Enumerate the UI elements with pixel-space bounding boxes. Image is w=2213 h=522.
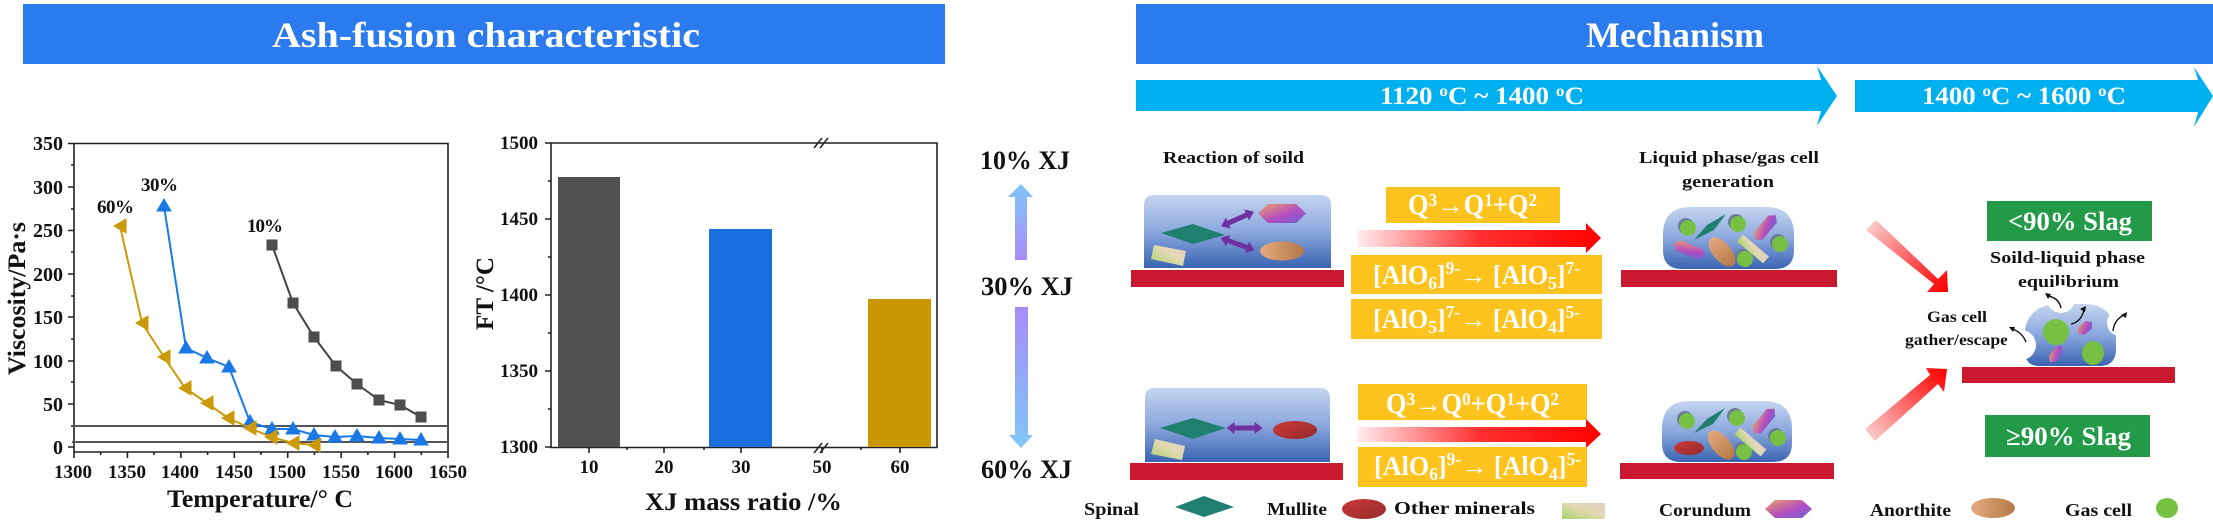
bar: 60 [868,299,931,447]
reaction box: Q3 top: 3 [1429,190,1437,210]
arrow: 1120 to 1400 C stage: C ~ 1400 [1448,83,1556,110]
heading: Mechanism [1136,4,2213,64]
x axis tick labels: 10 [580,457,598,478]
legend: other minerals [1394,498,1605,519]
reaction box: Q3 top: +Q [1493,190,1528,221]
x axis tick labels: 20 [654,457,674,478]
reaction box: AlO6 to AlO5: 7- [1565,258,1580,278]
x axis tick labels: 1550 [322,462,360,483]
y axis tick labels: 1450 [500,209,538,230]
heading: Mechanism: Mechanism [1586,15,1764,55]
y axis tick labels: 250 [33,220,63,242]
y axis tick labels: 1300 [500,437,538,458]
arrow: 1400 to 1600 C stage: 1400 [1922,83,1972,110]
y axis tick labels: 50 [43,394,63,416]
heading: Ash-fusion characteristic: Ash-fusion characteristic [272,15,700,55]
arrow: 1120 to 1400 C stage: 1120 [1380,83,1429,110]
reaction box: AlO6 to AlO4: ] [1558,451,1566,481]
reaction box: Q3 top: Q [1408,190,1430,221]
label: Liquid phase/gas cell generation [1639,148,1819,191]
y axis tick labels: 0 [53,437,63,459]
label: Soild-liquid phase equilibrium [1990,248,2146,291]
x axis tick labels [580,457,910,478]
arrow: down [1009,307,1033,448]
label: Gas cell gather/escape: Gas cell [1927,309,1988,326]
reaction box: Q3 bottom: 3 [1407,389,1415,409]
y axis tick labels: 100 [33,351,63,373]
x axis tick labels: 1650 [429,462,467,483]
y axis tick labels: 150 [33,307,63,329]
arrow: 1120 to 1400 C stage [1136,66,1837,126]
series labels: 10% [247,216,283,237]
legend: other minerals: Other minerals [1394,498,1535,518]
reaction box: AlO5 to AlO4: 4 [1548,317,1557,337]
arrow: 1120 to 1400 C stage: C [1564,83,1584,110]
reaction box: AlO5 to AlO4: → [AlO [1460,304,1548,334]
arrow: 1400 to 1600 C stage: o [2098,83,2107,100]
arrow: 1120 to 1400 C stage: o [1439,83,1448,100]
reaction box: AlO6 to AlO5: 5 [1548,273,1557,293]
reaction box: Q3 top: →Q [1437,190,1484,221]
diagram: equilibrium droplet with escaping gas [1962,285,2175,383]
y axis tick labels [500,133,538,458]
x axis tick labels: 1500 [268,462,306,483]
axis break marks [814,138,828,453]
diagram: bottom liquid phase and gas cells [1620,401,1834,479]
line chart: viscosity vs temperature [4,133,467,513]
series labels: 60% [97,197,134,218]
legend: spinal: Spinal [1084,499,1139,519]
reaction box: AlO6 to AlO5: → [AlO [1460,260,1548,290]
x axis tick labels: 30 [732,457,750,478]
series: 60% XJ [114,219,320,452]
reaction box: AlO6 to AlO4 [1358,447,1587,487]
diagram: bottom solid reaction [1130,388,1343,480]
reaction box: AlO6 to AlO4: 4 [1549,464,1558,484]
label: 30% XJ: 30% XJ [981,272,1073,301]
reaction box: Q3 bottom: 2 [1550,389,1559,409]
arrow: 1120 to 1400 C stage: o [1556,83,1564,100]
diagram: top liquid phase and gas cells [1621,207,1837,287]
arrow: bottom red reaction [1358,419,1601,448]
bar chart: FT vs XJ mass ratio [472,133,937,516]
legend: gas cell: Gas cell [2065,500,2132,520]
reaction box: AlO6 to AlO5: 9- [1446,258,1460,278]
legend: corundum: Corundum [1659,500,1751,520]
arrow: diagonal down to equilibrium [1866,220,1948,292]
label: 10% XJ: 10% XJ [980,146,1070,175]
reaction box: AlO5 to AlO4 [1351,299,1602,339]
x axis tick labels: 1450 [215,462,253,483]
legend: mullite [1267,499,1386,519]
reaction box: Q3 top: 1 [1484,190,1493,210]
reaction box: Q3 bottom [1358,384,1587,420]
x axis tick labels: 1600 [375,462,413,483]
x axis tick labels: 50 [812,457,832,478]
arrow: diagonal up to equilibrium [1865,368,1947,441]
axis title: XJ mass ratio: XJ mass ratio /% [645,489,842,516]
label: Gas cell gather/escape [1905,309,2008,349]
label: Liquid phase/gas cell generation: generation [1682,172,1775,191]
label: Gas cell gather/escape: gather/escape [1905,332,2008,349]
axis title: viscosity: Viscosity/Pa·s [4,222,31,375]
reaction box: Q3 bottom: 1 [1506,389,1515,409]
x axis tick labels: 1400 [161,462,199,483]
label: Soild-liquid phase equilibrium: Soild-liquid phase [1990,248,2146,267]
reaction box: AlO6 to AlO5 [1351,255,1602,294]
reaction box: AlO6 to AlO5: 6 [1428,273,1437,293]
reaction box: AlO6 to AlO5: ] [1557,260,1565,290]
legend: corundum [1659,500,1812,520]
badge: at least 90% slag [1985,415,2150,457]
reaction box: AlO5 to AlO4: 5 [1428,317,1437,337]
reaction box: AlO5 to AlO4: [AlO [1373,304,1430,334]
legend: anorthite: Anorthite [1870,500,1951,520]
y axis tick labels: 1350 [500,361,538,382]
arrow: up [1008,184,1033,260]
y axis tick labels: 1400 [500,285,538,306]
axis title: FT: FT /°C [472,257,499,330]
legend: gas cell [2065,498,2178,520]
x axis tick labels: 1300 [54,462,92,483]
XJ ratio scale [980,146,1073,484]
arrow: 1400 to 1600 C stage [1855,67,2213,127]
reaction box: Q3 bottom: →Q [1415,389,1462,420]
y axis tick labels: 350 [33,133,63,155]
reaction box: AlO5 to AlO4: 7- [1446,302,1460,322]
series labels: 30% [141,175,178,196]
reaction box: Q3 bottom: +Q [1471,389,1506,420]
reaction box: Q3 bottom: +Q [1515,389,1550,420]
bar: 10 [558,177,620,447]
reaction box: AlO6 to AlO5: [AlO [1373,260,1430,290]
reaction box: AlO6 to AlO4: ] [1438,451,1447,481]
y axis tick labels: 300 [33,177,63,199]
axis title: temperature: Temperature/° C [167,486,353,513]
series: 10% XJ [266,240,426,422]
y axis tick labels [33,133,63,459]
arrow: top red reaction [1358,223,1601,253]
legend: mullite: Mullite [1267,499,1327,519]
heading: Ash-fusion characteristic [23,4,945,64]
legend: spinal [1084,496,1234,519]
label: Liquid phase/gas cell generation: Liquid phase/gas cell [1639,148,1819,167]
series labels [97,175,283,237]
reaction box: Q3 bottom: 0 [1462,389,1471,409]
reaction box: AlO5 to AlO4: ] [1437,304,1446,334]
reaction box: AlO6 to AlO4: 5- [1566,449,1581,469]
reaction box: AlO5 to AlO4: ] [1557,304,1565,334]
y axis tick labels: 200 [33,264,63,286]
badge: at least 90% slag: ≥90% Slag [2006,422,2131,451]
diagram: top solid reaction [1131,195,1344,287]
reaction box: Q3 bottom: Q [1386,389,1408,420]
legend [1084,496,2178,520]
reaction box: AlO6 to AlO4: → [AlO [1461,451,1549,481]
badge: under 90% slag [1987,201,2152,241]
reaction box: AlO5 to AlO4: 5- [1565,302,1580,322]
reaction box: Q3 top: 2 [1528,190,1537,210]
arrow: 1400 to 1600 C stage: o [1982,83,1991,100]
reaction box: AlO6 to AlO4: 9- [1447,449,1461,469]
label: 60% XJ: 60% XJ [981,455,1072,484]
x axis tick labels: 60 [890,457,910,478]
bar: 30 [709,229,772,447]
legend: anorthite [1870,498,2015,520]
reaction box: AlO6 to AlO4: 6 [1429,464,1438,484]
label: Soild-liquid phase equilibrium: equilibrium [2018,272,2119,291]
arrow: 1400 to 1600 C stage: C [2107,83,2126,110]
reaction box: AlO6 to AlO5: ] [1437,260,1446,290]
reaction box: AlO6 to AlO4: [AlO [1374,451,1431,481]
series: 30% XJ [157,199,428,445]
x axis tick labels: 1350 [108,462,146,483]
badge: under 90% slag: <90% Slag [2008,207,2132,236]
y axis tick labels: 1500 [500,133,538,154]
arrow: 1400 to 1600 C stage: C ~ 1600 [1991,83,2098,110]
reaction box: Q3 top [1386,187,1560,223]
x axis tick labels [54,462,467,483]
label: Reaction of soild: Reaction of soild [1163,148,1305,167]
